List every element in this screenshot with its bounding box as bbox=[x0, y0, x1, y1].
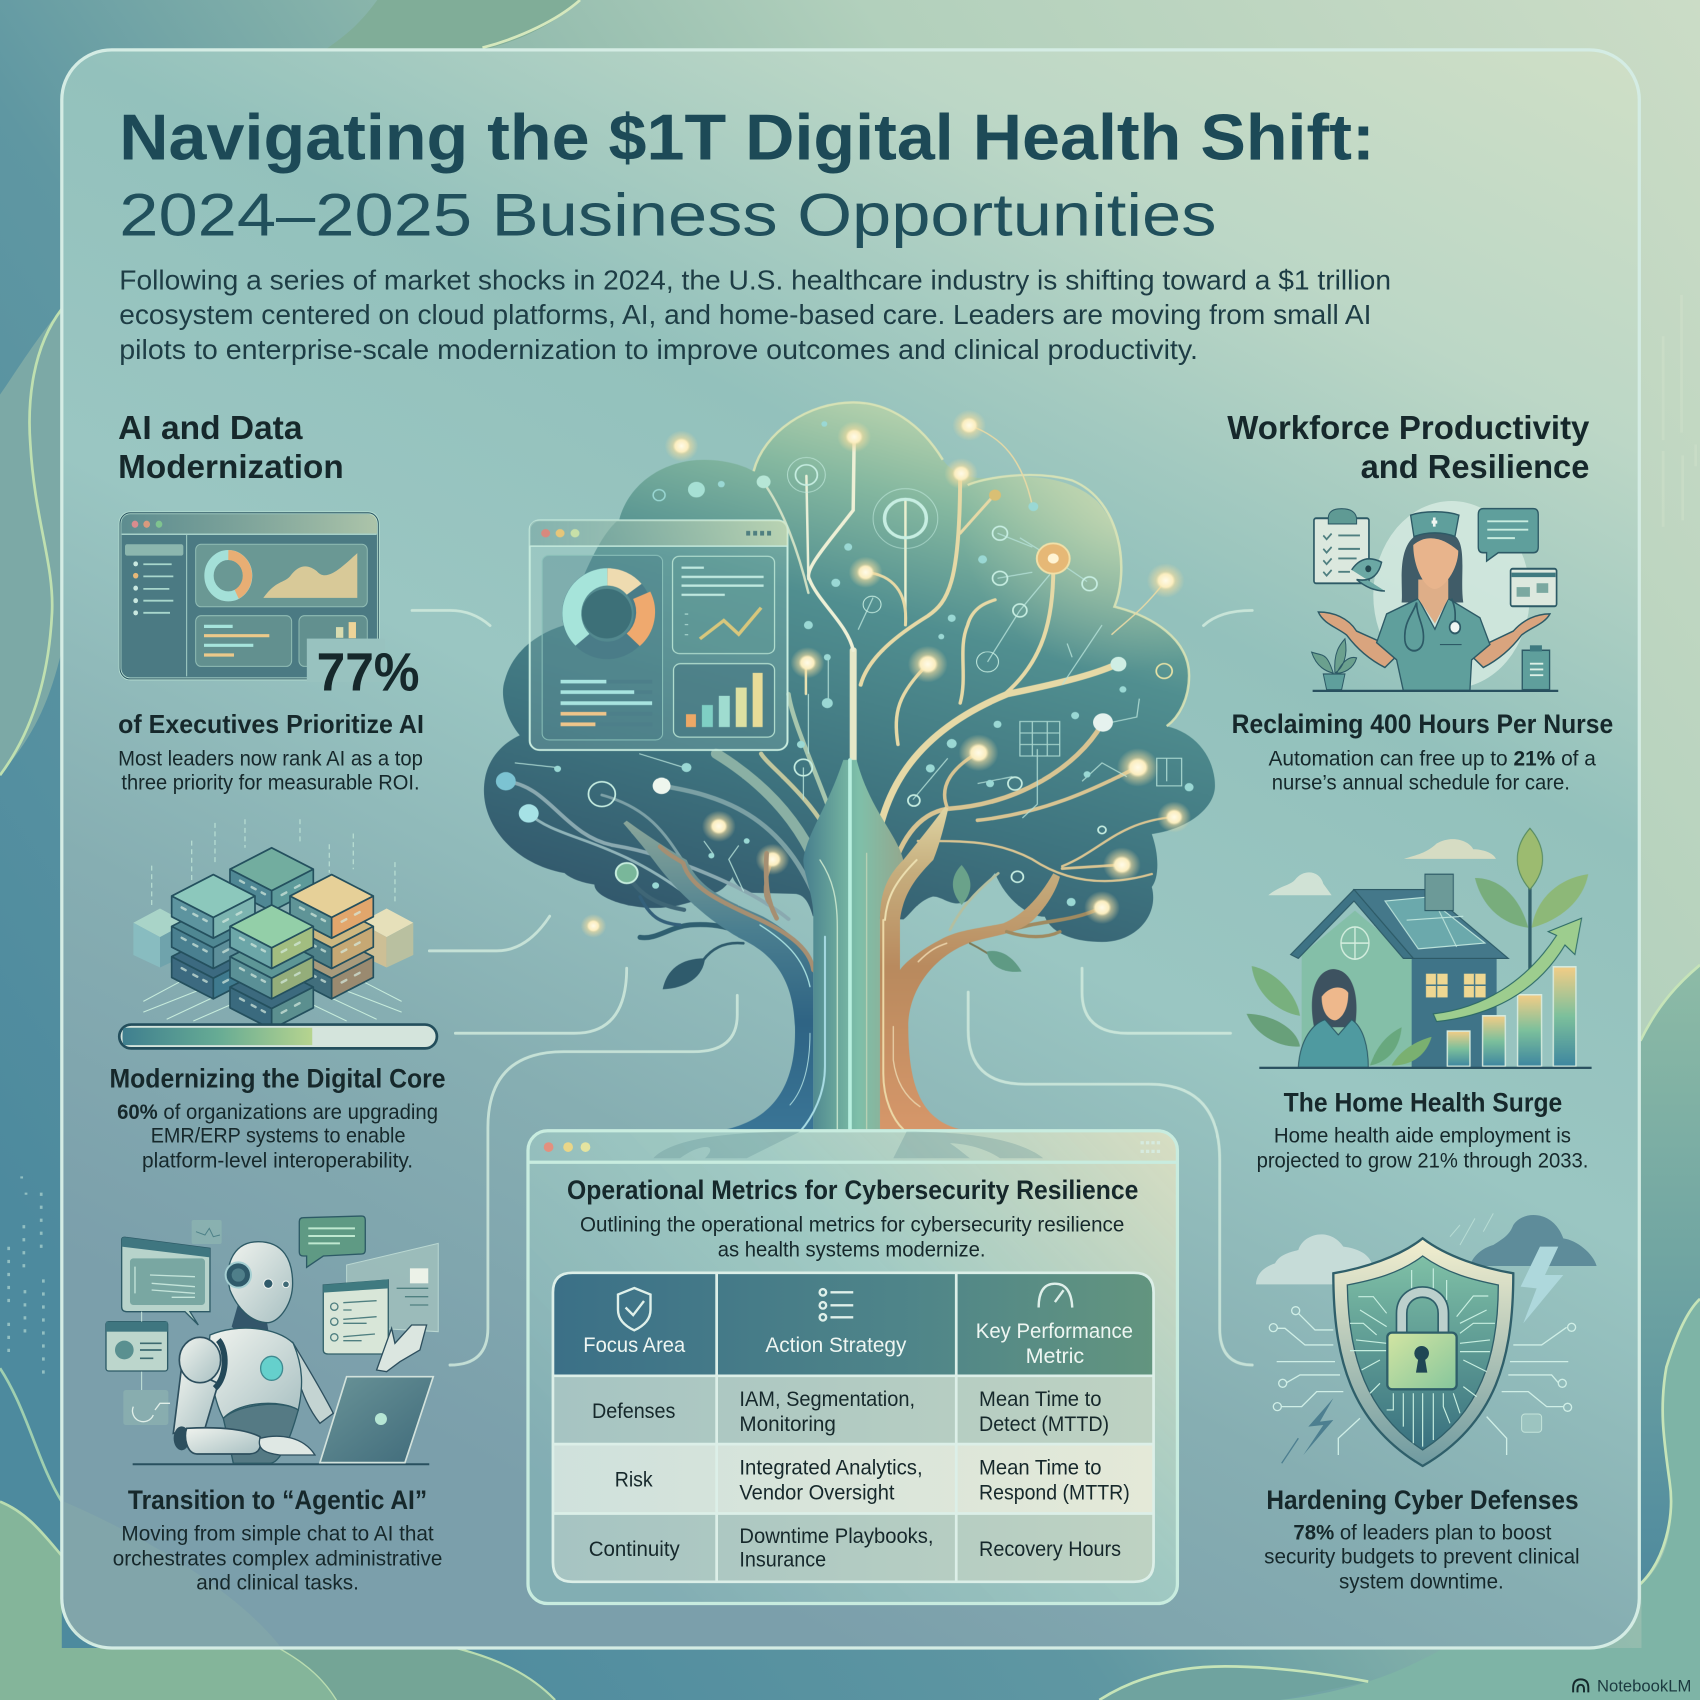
panel description bbox=[580, 1212, 1124, 1262]
header labels: Focus Area bbox=[583, 1334, 685, 1357]
table cells bbox=[589, 1386, 1130, 1572]
left limb bbox=[623, 821, 813, 1129]
illustration: robot agent bbox=[106, 1216, 438, 1464]
text: agentic AI: Transition to “Agentic AI” bbox=[128, 1484, 427, 1515]
stat: 77%: 77% bbox=[317, 643, 420, 703]
text: home health surge: projected to grow 21% through 2033. bbox=[1257, 1148, 1588, 1173]
server blocks bbox=[230, 848, 313, 911]
illustration: nurse bbox=[1312, 501, 1558, 691]
bar chart bbox=[686, 673, 763, 727]
table cells: Downtime Playbooks, bbox=[739, 1523, 933, 1548]
title: Navigating the $1T Digital Health Shift: bbox=[119, 100, 1375, 173]
padlock bbox=[1387, 1292, 1457, 1389]
arms bbox=[1318, 612, 1397, 667]
NotebookLM badge: NotebookLM bbox=[1597, 1676, 1691, 1695]
growth arrow bbox=[1433, 918, 1582, 1022]
clouds bbox=[1256, 1234, 1372, 1284]
robot neck and body bbox=[232, 1303, 270, 1340]
face bbox=[1413, 538, 1458, 589]
text: modernizing the digital core: 60% of organizations are upgrading bbox=[117, 1099, 438, 1124]
text: hardening cyber defenses: system downtime. bbox=[1339, 1568, 1504, 1593]
illustration: home health bbox=[1247, 828, 1592, 1068]
ring nodes bbox=[588, 457, 1172, 882]
tree crown bbox=[484, 402, 1215, 942]
text: agentic AI: Moving from simple chat to AI that bbox=[121, 1521, 434, 1546]
progress lines bbox=[561, 682, 652, 724]
crown outline highlight bbox=[754, 402, 1189, 726]
small nodes bbox=[554, 421, 1194, 906]
text: reclaiming 400 hours: Reclaiming 400 Hours Per Nurse bbox=[1232, 708, 1613, 739]
table cells: Mean Time to bbox=[979, 1386, 1102, 1411]
thin circuit lines bbox=[515, 533, 1182, 891]
text: reclaiming 400 hours: Automation can free up to 21% of a bbox=[1268, 745, 1597, 770]
text lines and arrow chart bbox=[681, 568, 764, 639]
hair bbox=[1402, 529, 1463, 602]
text: modernizing the digital core: EMR/ERP systems to enable bbox=[151, 1123, 405, 1148]
bars bbox=[1447, 1031, 1470, 1066]
table cells: Integrated Analytics, bbox=[739, 1454, 923, 1479]
text: hardening cyber defenses: 78% of leaders plan to boost bbox=[1293, 1520, 1551, 1545]
text: home health surge: The Home Health Surge bbox=[1284, 1086, 1562, 1117]
right section heading: Workforce Productivity bbox=[1227, 410, 1590, 447]
clouds bbox=[1268, 839, 1496, 895]
document bbox=[1522, 645, 1550, 690]
central tree bbox=[484, 402, 1215, 942]
speech bubble bbox=[1478, 509, 1538, 561]
table cells: Continuity bbox=[589, 1536, 680, 1561]
icon: shield check bbox=[618, 1288, 651, 1330]
robot head bbox=[228, 1242, 293, 1323]
robot arm right bbox=[377, 1325, 427, 1372]
table cells: Monitoring bbox=[739, 1411, 836, 1436]
title bbox=[119, 100, 1375, 248]
illustration: shield and lock bbox=[1256, 1213, 1597, 1466]
table cells: Defenses bbox=[592, 1398, 676, 1423]
nurse cap bbox=[1411, 512, 1459, 537]
left section heading: Modernization bbox=[118, 449, 344, 486]
right limb bbox=[880, 807, 1060, 1129]
text: hardening cyber defenses bbox=[1264, 1484, 1580, 1593]
home aide bbox=[1298, 969, 1368, 1067]
faint roots bbox=[653, 1132, 1043, 1158]
leaves bbox=[663, 865, 1022, 989]
central stem bbox=[846, 650, 860, 905]
shield inner bbox=[1347, 1256, 1498, 1450]
table cells: Mean Time to bbox=[979, 1454, 1102, 1479]
table cells: Risk bbox=[615, 1466, 653, 1491]
ground bbox=[1259, 1065, 1592, 1071]
text: home health surge bbox=[1257, 1086, 1588, 1173]
left section heading bbox=[118, 410, 344, 486]
panel description: Outlining the operational metrics for cybersecurity resilience bbox=[580, 1212, 1124, 1237]
potted plant bbox=[1312, 639, 1357, 690]
illustration: analytics dashboard bbox=[120, 513, 378, 679]
stethoscope bbox=[1405, 599, 1455, 651]
text: hardening cyber defenses: Hardening Cyber Defenses bbox=[1266, 1484, 1579, 1515]
shield outer bbox=[1333, 1238, 1513, 1466]
floating windows bbox=[106, 1216, 438, 1425]
table cells: Detect (MTTD) bbox=[979, 1411, 1109, 1436]
header labels: Key Performance bbox=[976, 1320, 1133, 1343]
branches behind trunk bbox=[640, 853, 777, 960]
centre trunk bbox=[803, 760, 903, 1129]
crown glow bbox=[918, 460, 1189, 726]
tree trunk bbox=[623, 760, 1060, 1132]
text: executives prioritize AI bbox=[118, 709, 424, 794]
right twigs bbox=[950, 873, 1060, 957]
table cells: Insurance bbox=[739, 1547, 826, 1572]
house bbox=[1412, 955, 1497, 1067]
donut chart bbox=[572, 577, 646, 650]
circuit traces bbox=[1269, 1307, 1576, 1455]
floor lines bbox=[143, 980, 402, 1021]
table cells: Respond (MTTR) bbox=[979, 1479, 1130, 1504]
left section heading: AI and Data bbox=[118, 410, 303, 447]
floating dashboard bbox=[530, 520, 787, 750]
table cells: IAM, Segmentation, bbox=[739, 1386, 915, 1411]
right section heading bbox=[1227, 410, 1590, 486]
text: modernizing the digital core: Modernizing the Digital Core bbox=[110, 1062, 446, 1093]
text: reclaiming 400 hours bbox=[1232, 708, 1613, 794]
header labels: Metric bbox=[1026, 1345, 1084, 1368]
table cells: Recovery Hours bbox=[979, 1536, 1121, 1561]
illustration: server stacks bbox=[133, 819, 413, 1029]
side cubes bbox=[133, 909, 413, 967]
right section heading: and Resilience bbox=[1361, 449, 1589, 486]
intro paragraph: ecosystem centered on cloud platforms, AI, and home-based care. Leaders are moving from small AI bbox=[119, 298, 1371, 330]
window controls bbox=[544, 1142, 1160, 1152]
text: executives prioritize AI: Most leaders now rank AI as a top bbox=[118, 745, 423, 770]
window dots bbox=[541, 529, 771, 537]
robot arm left bbox=[173, 1367, 218, 1433]
text: home health surge: Home health aide employment is bbox=[1274, 1123, 1571, 1148]
panel description: as health systems modernize. bbox=[718, 1237, 986, 1262]
panel heading: Operational Metrics for Cybersecurity Resilience bbox=[567, 1174, 1138, 1205]
icon: gauge bbox=[1039, 1284, 1072, 1308]
intro paragraph: pilots to enterprise-scale modernization to improve outcomes and clinical productivity. bbox=[119, 333, 1198, 365]
chart cards bbox=[542, 555, 663, 740]
clipboard bbox=[1314, 509, 1385, 591]
progress bar bbox=[119, 1025, 437, 1048]
left branches bbox=[506, 663, 851, 933]
trunk light lines bbox=[800, 760, 947, 1132]
light beams bbox=[152, 819, 395, 905]
text: modernizing the digital core: platform-level interoperability. bbox=[142, 1148, 413, 1173]
text: executives prioritize AI: of Executives Prioritize AI bbox=[118, 709, 424, 739]
glowing nodes bbox=[580, 410, 1191, 938]
header labels: Action Strategy bbox=[765, 1334, 907, 1357]
lower right branches bbox=[918, 753, 1173, 931]
floor bbox=[1313, 688, 1558, 694]
text: reclaiming 400 hours: nurse’s annual schedule for care. bbox=[1272, 769, 1570, 794]
text: executives prioritize AI: three priority for measurable ROI. bbox=[121, 769, 420, 794]
orange hub node bbox=[1037, 543, 1070, 574]
side leaves bbox=[1247, 966, 1432, 1066]
text: hardening cyber defenses: security budgets to prevent clinical bbox=[1264, 1543, 1580, 1568]
text: agentic AI: and clinical tasks. bbox=[196, 1569, 359, 1594]
ground line bbox=[133, 1461, 429, 1467]
table cells: Vendor Oversight bbox=[739, 1479, 894, 1504]
metrics table bbox=[553, 1273, 1154, 1582]
text: modernizing the digital core bbox=[110, 1062, 446, 1173]
small monitor bbox=[1511, 569, 1557, 606]
text: agentic AI bbox=[113, 1484, 442, 1594]
gold branches right bbox=[764, 425, 1166, 887]
limb highlight strokes bbox=[660, 847, 813, 1105]
laptop bbox=[320, 1377, 433, 1463]
intro paragraph: Following a series of market shocks in 2024, the U.S. healthcare industry is shifting toward a $1 trillion bbox=[119, 263, 1391, 295]
text: agentic AI: orchestrates complex administrative bbox=[113, 1546, 442, 1571]
scrubs bbox=[1377, 599, 1490, 690]
plant with leaves bbox=[1475, 828, 1588, 970]
panel: operational metrics bbox=[528, 1131, 1177, 1604]
header labels bbox=[583, 1320, 1133, 1368]
title: 2024–2025 Business Opportunities bbox=[119, 180, 1216, 248]
connector lines bbox=[412, 610, 1252, 1365]
lightning bolts bbox=[1521, 1247, 1563, 1323]
icon: list bbox=[820, 1289, 853, 1321]
blue and green nodes bbox=[496, 475, 1126, 883]
intro paragraph bbox=[119, 263, 1391, 365]
